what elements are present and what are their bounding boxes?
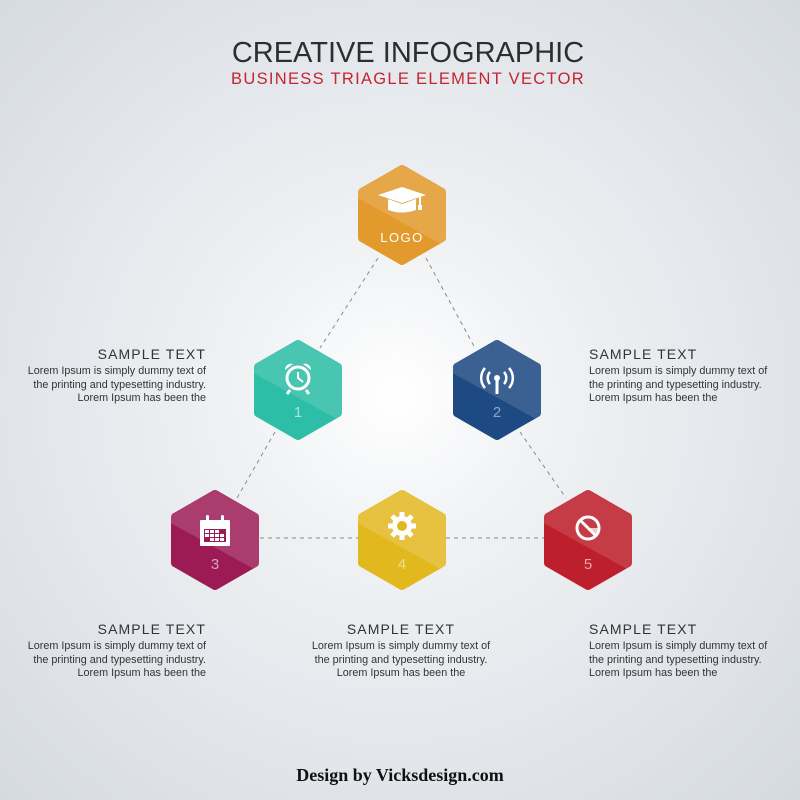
hexagon 3 [171,490,259,590]
text block 5: SAMPLE TEXT [589,621,697,637]
hexagon 2: 2 [493,404,501,421]
hexagon 4 [358,490,446,590]
icon: gear [388,512,416,540]
text block 1: the printing and typesetting industry. [33,378,206,390]
text block 5: Lorem Ipsum is simply dummy text of [589,640,767,652]
text block 4: Lorem Ipsum is simply dummy text of [312,640,490,652]
text block 3: Lorem Ipsum is simply dummy text of [28,640,206,652]
text block 1: Lorem Ipsum is simply dummy text of [28,365,206,377]
icon: pie chart [577,517,599,539]
text block 2: the printing and typesetting industry. [589,378,762,390]
text block 4: SAMPLE TEXT [347,621,455,637]
text block 2: Lorem Ipsum has been the [589,392,717,404]
hexagon 5: 5 [584,556,592,573]
hexagon 2 [453,340,541,440]
title: CREATIVE INFOGRAPHIC [232,37,584,69]
icon: antenna [481,368,513,388]
hexagon 4: 4 [398,556,406,573]
text block 1 [28,346,206,404]
icon: alarm clock [287,367,309,394]
icon: calendar [200,520,230,546]
text block 4 [312,621,490,679]
subtitle: BUSINESS TRIAGLE ELEMENT VECTOR [231,70,585,88]
text block 2 [589,346,768,404]
hexagon 5 [544,490,632,590]
hexagon 1 [254,340,342,440]
text block 1: Lorem Ipsum has been the [78,392,206,404]
hexagon: logo [358,165,446,265]
text block 4: the printing and typesetting industry. [315,654,487,666]
text block 3: Lorem Ipsum has been the [78,667,206,679]
hexagon: logo: LOGO [380,230,424,245]
hexagon 1: 1 [294,404,302,421]
text block 1: SAMPLE TEXT [98,346,206,362]
text block 2: SAMPLE TEXT [589,346,697,362]
text block 5 [589,621,768,679]
text block 4: Lorem Ipsum has been the [337,667,465,679]
connector lines [237,258,566,538]
text block 3 [28,621,206,679]
text block 2: Lorem Ipsum is simply dummy text of [589,365,767,377]
footer credit: Design by Vicksdesign.com [296,765,504,785]
diagram [171,165,632,590]
hexagon 3: 3 [211,556,219,573]
text block 3: the printing and typesetting industry. [33,654,206,666]
text block 5: the printing and typesetting industry. [589,654,762,666]
icon: graduation cap [378,187,426,212]
text block 5: Lorem Ipsum has been the [589,667,717,679]
text block 3: SAMPLE TEXT [98,621,206,637]
